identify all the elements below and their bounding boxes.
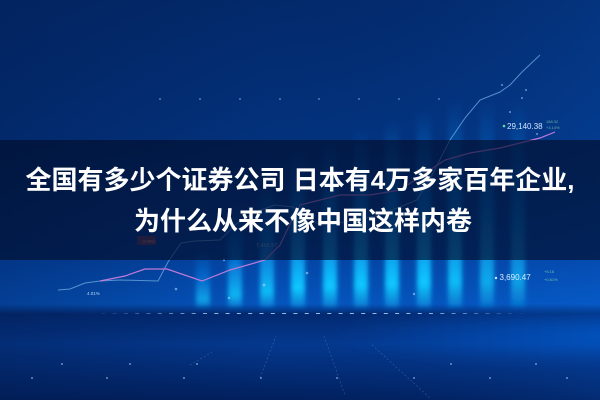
label: 29,140.38: 29,140.38 xyxy=(507,122,543,131)
label: 4.01%: 4.01% xyxy=(87,291,100,296)
label: red tag: -3.09% xyxy=(141,239,155,244)
floor glow xyxy=(330,318,600,352)
label: 3,690.47: +0.61% xyxy=(544,277,558,282)
label: 7,465.57: 7,465.57 xyxy=(256,243,277,249)
title xyxy=(26,165,574,236)
title: 全国有多少个证券公司 日本有4万多家百年企业, xyxy=(26,165,574,195)
scattered dots xyxy=(31,84,568,379)
dark title band xyxy=(0,140,600,260)
label: 29,140.38: 188.32 xyxy=(546,119,559,124)
dashed baseline xyxy=(90,312,530,314)
light pillars xyxy=(196,100,525,307)
label: 29,140.38: +3.14% xyxy=(546,125,560,130)
chart: blue line xyxy=(58,55,540,290)
title: 为什么从来不像中国这样内卷 xyxy=(134,206,472,236)
label: 3,690.47 xyxy=(495,269,558,282)
label: red tag xyxy=(137,236,156,245)
chart: pink line xyxy=(100,132,555,281)
label: 29,140.38 xyxy=(503,119,560,131)
label: 3,690.47: 3,690.47 xyxy=(500,273,531,282)
label: 3,690.47: +5.16 xyxy=(544,269,555,274)
floor perspective lines xyxy=(190,336,430,398)
